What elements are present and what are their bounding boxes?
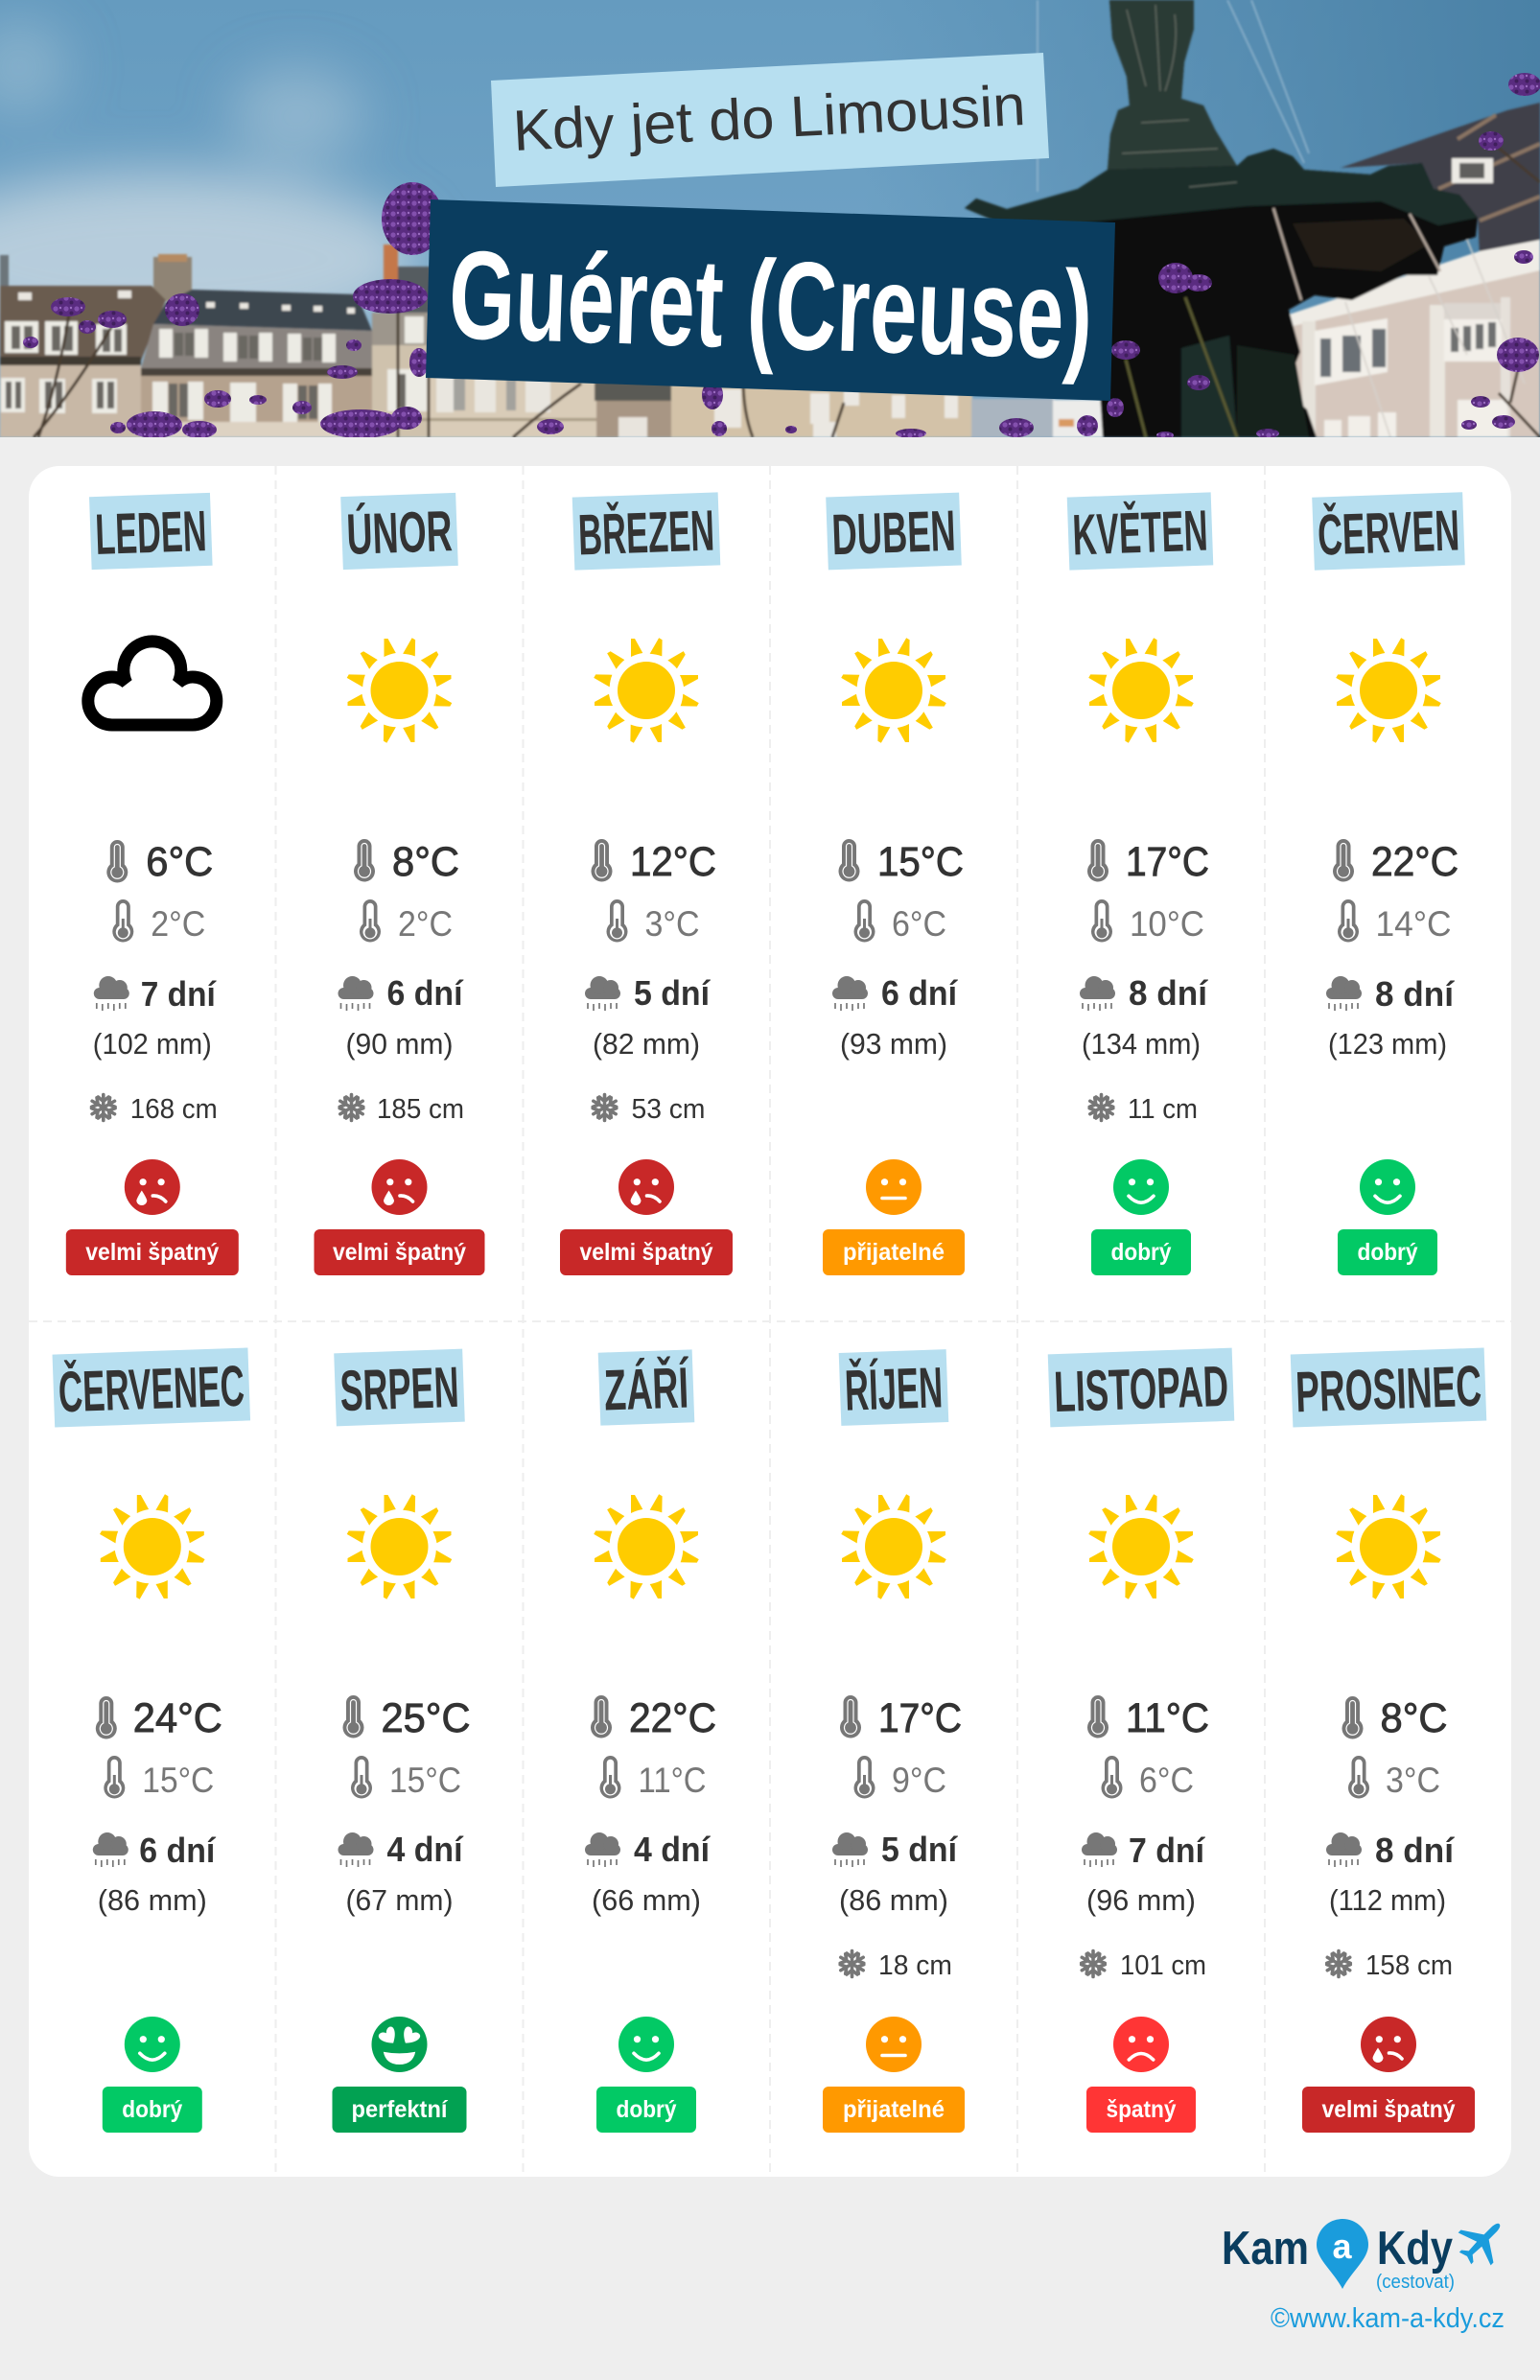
month tag: LISTOPAD <box>1053 1354 1229 1424</box>
rating badge <box>823 1229 965 1275</box>
icon: sun <box>594 638 699 743</box>
rating badge <box>315 1229 485 1275</box>
rating badge <box>103 2087 202 2133</box>
rainy days: 4 dní <box>634 1830 711 1869</box>
right building <box>1341 103 1540 256</box>
icon: sun <box>100 1494 205 1599</box>
rating badge: dobrý <box>616 2096 677 2123</box>
rainy days <box>93 1831 216 1870</box>
precipitation: (82 mm) <box>593 1027 700 1061</box>
low temperature: 2°C <box>398 904 453 944</box>
snow: 101 cm <box>1120 1950 1206 1981</box>
rating badge <box>1086 2087 1196 2133</box>
icon: sun <box>594 1494 699 1599</box>
snow <box>89 1094 218 1125</box>
month: březen <box>560 492 733 1275</box>
month tag <box>53 1347 250 1428</box>
low temperature <box>104 1756 214 1800</box>
low temperature: 2°C <box>151 904 205 944</box>
month tag: ZÁŘÍ <box>603 1355 690 1423</box>
snow: 185 cm <box>377 1094 464 1125</box>
precipitation: (90 mm) <box>345 1027 453 1061</box>
rainy days <box>1326 974 1455 1014</box>
rainy days <box>338 973 463 1013</box>
month tag: ŘÍJEN <box>844 1355 944 1423</box>
month tag <box>89 493 213 570</box>
high temperature: 8°C <box>392 839 459 885</box>
icon: sun <box>347 1494 452 1599</box>
low temperature <box>853 899 946 944</box>
month: prosinec <box>1291 1347 1486 2133</box>
rating badge: přijatelné <box>843 1239 945 1266</box>
month tag <box>1048 1348 1234 1427</box>
low temperature <box>112 899 205 944</box>
rainy days: 7 dní <box>1129 1831 1205 1870</box>
precipitation: (93 mm) <box>840 1027 947 1061</box>
icon: sun <box>1336 1494 1441 1599</box>
snow: 53 cm <box>631 1094 706 1125</box>
high temperature <box>591 1695 716 1741</box>
precipitation: (123 mm) <box>1328 1027 1447 1061</box>
low temperature: 11°C <box>639 1761 706 1800</box>
low temperature <box>853 1756 946 1800</box>
high temperature: 8°C <box>1381 1695 1448 1741</box>
month tag <box>572 492 720 571</box>
high temperature <box>1342 1695 1448 1741</box>
low temperature: 14°C <box>1375 904 1452 944</box>
precipitation: (102 mm) <box>93 1027 212 1061</box>
high temperature: 6°C <box>146 839 213 885</box>
rating badge: dobrý <box>1110 1239 1172 1266</box>
left buildings <box>0 255 9 290</box>
middle buildings below the title <box>427 369 597 437</box>
rainy days: 6 dní <box>139 1831 216 1870</box>
rating badge <box>66 1229 239 1275</box>
rainy days <box>338 1830 463 1869</box>
rating badge: perfektní <box>351 2096 448 2123</box>
month tag <box>839 1349 948 1426</box>
low temperature: 15°C <box>142 1761 214 1800</box>
icon: map pin <box>1317 2219 1368 2289</box>
logo: Kam a Kdy: Kdy <box>1377 2223 1453 2275</box>
precipitation: (66 mm) <box>592 1883 701 1917</box>
flowers <box>23 73 1540 439</box>
icon: map pin: a <box>1332 2227 1352 2266</box>
month: červenec <box>53 1347 250 2133</box>
precipitation: (134 mm) <box>1082 1027 1201 1061</box>
snow <box>338 1094 464 1125</box>
subtitle tag: Kdy jet do Limousin <box>511 73 1027 163</box>
rating badge: přijatelné <box>843 2096 945 2123</box>
rainy days: 4 dní <box>387 1830 463 1869</box>
rainy days <box>94 974 217 1014</box>
snow <box>1080 1950 1206 1981</box>
month: říjen <box>823 1349 965 2133</box>
high temperature <box>838 839 964 885</box>
precipitation: (86 mm) <box>839 1883 948 1917</box>
month tag <box>826 493 962 570</box>
rating face <box>1360 1159 1415 1215</box>
rainy days: 6 dní <box>881 973 958 1013</box>
month tag: ČERVENEC <box>58 1354 245 1424</box>
month tag <box>340 493 458 570</box>
snow: 18 cm <box>878 1950 952 1981</box>
rating face <box>372 2017 428 2072</box>
low temperature <box>351 1756 461 1800</box>
snow: 158 cm <box>1365 1950 1453 1981</box>
low temperature <box>360 899 453 944</box>
low temperature <box>1348 1756 1440 1800</box>
low temperature: 6°C <box>1139 1761 1194 1800</box>
rating face <box>866 2017 922 2072</box>
precipitation: (96 mm) <box>1086 1883 1196 1917</box>
precipitation: (67 mm) <box>345 1883 453 1917</box>
rating badge: dobrý <box>1358 1239 1418 1266</box>
icon: sun <box>1088 1494 1194 1599</box>
rainy days: 6 dní <box>387 973 463 1013</box>
rainy days: 7 dní <box>141 974 217 1014</box>
rainy days: 8 dní <box>1375 974 1455 1014</box>
month tag: SRPEN <box>338 1355 460 1423</box>
logo: Kam a Kdy: Kam <box>1222 2223 1309 2275</box>
icon: sun <box>841 1494 946 1599</box>
high temperature <box>1333 839 1458 885</box>
high temperature <box>343 1695 470 1741</box>
high temperature <box>840 1695 962 1741</box>
rating face <box>125 2017 180 2072</box>
low temperature: 3°C <box>1386 1761 1440 1800</box>
low temperature: 15°C <box>389 1761 461 1800</box>
month tag: KVĚTEN <box>1071 499 1209 567</box>
rating badge: velmi špatný <box>1321 2096 1456 2123</box>
high temperature <box>591 839 716 885</box>
website credit: ©www.kam-a-kdy.cz <box>1271 2303 1505 2334</box>
subtitle tag <box>491 53 1049 187</box>
high temperature: 22°C <box>629 1695 716 1741</box>
high temperature <box>96 1695 222 1741</box>
logo: Kam a Kdy: (cestovat) <box>1376 2272 1455 2293</box>
rating face <box>618 1159 674 1215</box>
month tag: LEDEN <box>94 499 207 567</box>
icon: sun <box>347 638 452 743</box>
rating badge: dobrý <box>122 2096 182 2123</box>
snow: 11 cm <box>1128 1094 1198 1125</box>
rating badge: velmi špatný <box>85 1239 219 1266</box>
month tag <box>598 1349 694 1426</box>
high temperature: 24°C <box>133 1695 222 1741</box>
low temperature: 6°C <box>892 904 946 944</box>
rainy days: 8 dní <box>1129 973 1208 1013</box>
rating badge <box>596 2087 696 2133</box>
high temperature <box>1087 839 1209 885</box>
rainy days <box>1082 1831 1205 1870</box>
high temperature: 11°C <box>1126 1695 1209 1741</box>
month: leden <box>66 493 239 1275</box>
rainy days <box>585 1830 711 1869</box>
month tag: ÚNOR <box>345 499 454 567</box>
low temperature: 9°C <box>892 1761 946 1800</box>
snow: 168 cm <box>130 1094 218 1125</box>
low temperature: 3°C <box>644 904 700 944</box>
rating badge: špatný <box>1107 2096 1177 2123</box>
rainy days: 5 dní <box>634 973 711 1013</box>
month: duben <box>823 493 965 1275</box>
high temperature <box>1087 1695 1209 1741</box>
month: únor <box>315 493 485 1275</box>
low temperature <box>600 1756 706 1800</box>
high temperature: 17°C <box>878 1695 962 1741</box>
low temperature <box>1101 1756 1194 1800</box>
low temperature <box>606 899 700 944</box>
snow <box>1087 1094 1198 1125</box>
month tag <box>334 1349 465 1426</box>
rating badge <box>332 2087 466 2133</box>
month: červen <box>1312 492 1465 1275</box>
rating badge <box>1302 2087 1475 2133</box>
month tag: BŘEZEN <box>577 499 715 567</box>
rating badge: velmi špatný <box>333 1239 466 1266</box>
high temperature: 17°C <box>1126 839 1209 885</box>
low temperature <box>1338 899 1452 944</box>
rating badge <box>823 2087 965 2133</box>
month: květen <box>1067 492 1213 1275</box>
rating face <box>1113 1159 1169 1215</box>
rating face <box>618 2017 674 2072</box>
low temperature <box>1091 899 1204 944</box>
month: srpen <box>332 1349 470 2133</box>
rainy days <box>832 1830 958 1869</box>
low temperature: 10°C <box>1130 904 1204 944</box>
icon: sun <box>841 638 946 743</box>
rating face <box>372 1159 428 1215</box>
rainy days <box>1080 973 1208 1013</box>
high temperature: 12°C <box>630 839 716 885</box>
icon: cloud <box>88 642 217 725</box>
month tag: DUBEN <box>830 499 957 567</box>
month tag <box>1312 492 1465 571</box>
rating face <box>866 1159 922 1215</box>
stems <box>34 146 1540 437</box>
snow <box>838 1950 952 1981</box>
icon: sun <box>1088 638 1194 743</box>
rainy days <box>1326 1831 1455 1870</box>
rainy days <box>832 973 958 1013</box>
month tag <box>1067 492 1213 571</box>
rating face <box>1113 2017 1169 2072</box>
rating badge: velmi špatný <box>579 1239 713 1266</box>
rainy days: 5 dní <box>881 1830 958 1869</box>
snow <box>1325 1950 1453 1981</box>
rating badge <box>560 1229 733 1275</box>
high temperature: 15°C <box>877 839 964 885</box>
rating badge <box>1091 1229 1191 1275</box>
precipitation: (112 mm) <box>1329 1883 1446 1917</box>
icon: airplane <box>1449 2207 1516 2275</box>
rating face <box>125 1159 180 1215</box>
rating face <box>1361 2017 1416 2072</box>
high temperature <box>354 839 459 885</box>
title tag <box>426 199 1115 401</box>
high temperature: 25°C <box>382 1695 470 1741</box>
header photo: fountain and buildings in Guéret <box>0 0 1540 439</box>
rainy days: 8 dní <box>1375 1831 1455 1870</box>
rainy days <box>585 973 711 1013</box>
panel: monthly climate card <box>29 466 1511 2177</box>
month: září <box>585 1349 716 2133</box>
logo: Kam a Kdy <box>1222 2207 1516 2293</box>
title tag: Guéret (Creuse) <box>447 223 1095 385</box>
precipitation: (86 mm) <box>98 1883 207 1917</box>
fountain <box>965 0 1478 437</box>
high temperature: 22°C <box>1371 839 1458 885</box>
icon: sun <box>1336 638 1441 743</box>
snow <box>591 1094 706 1125</box>
rating badge <box>1338 1229 1437 1275</box>
high temperature <box>106 839 213 885</box>
month: listopad <box>1048 1348 1234 2133</box>
